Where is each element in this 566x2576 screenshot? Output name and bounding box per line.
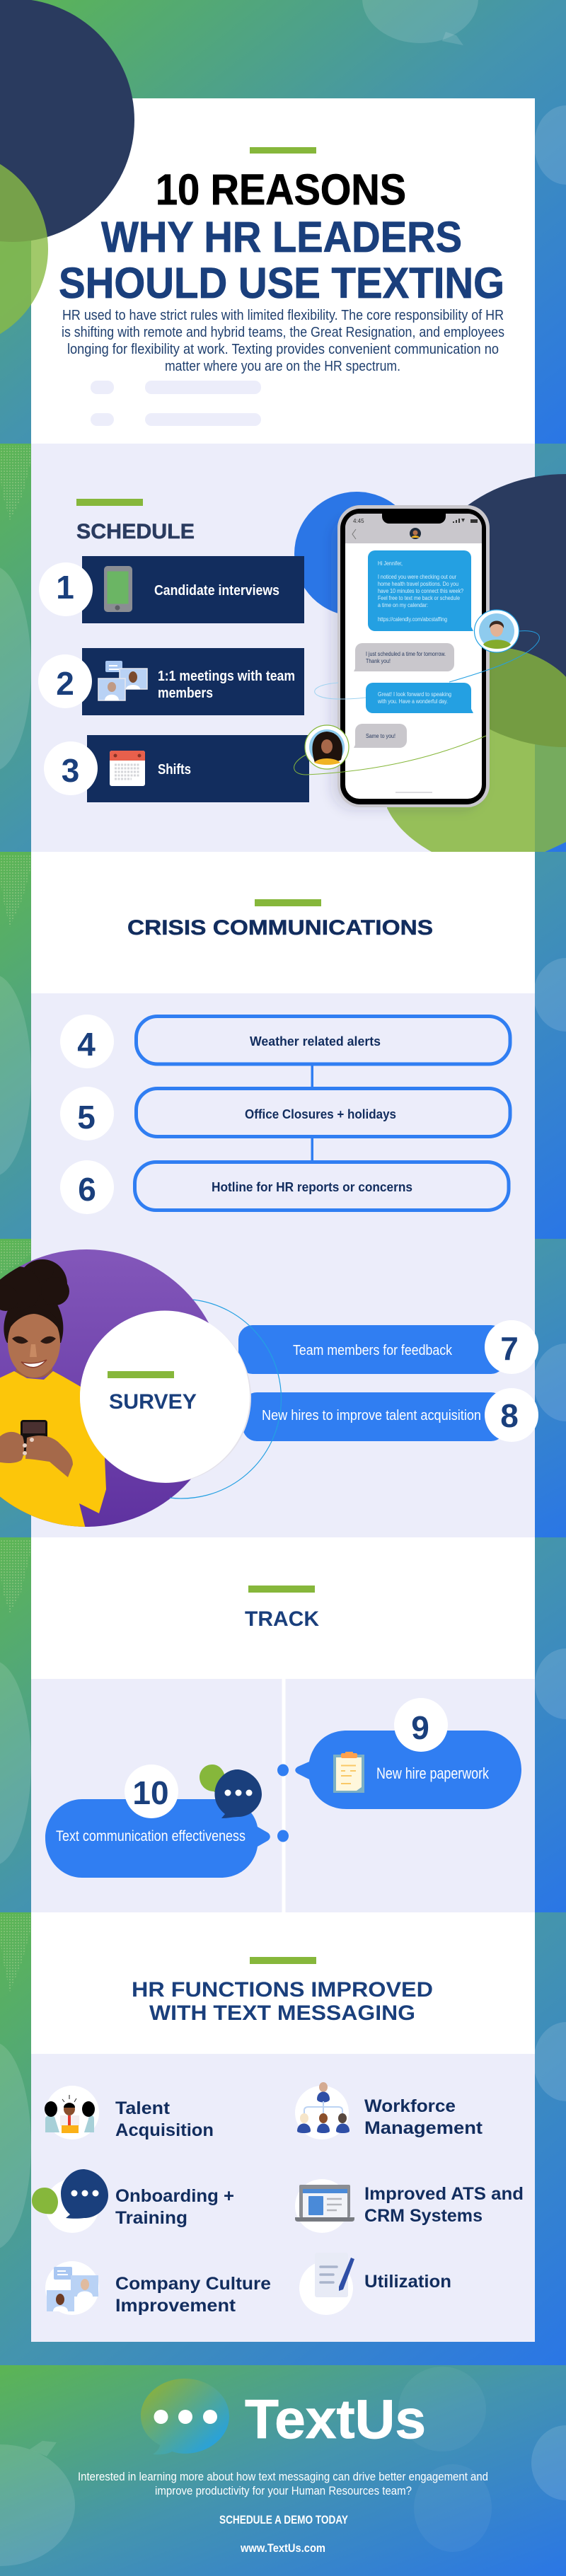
intro paragraph: longing for flexibility at work. Texting provides convenient communication no <box>67 342 499 357</box>
item 10: text communication effectiveness: Text communication effectiveness <box>56 1828 246 1844</box>
panel: track timeline <box>31 1679 535 1912</box>
placeholder pills <box>91 381 261 426</box>
title: SHOULD USE TEXTING <box>59 259 504 307</box>
item 3: shifts: 3 <box>62 752 79 789</box>
intro paragraph: matter where you are on the HR spectrum. <box>165 359 400 374</box>
chat bubble: outgoing 1: home health travel positions. Do you <box>378 581 458 587</box>
item 1: candidate interviews: 1 <box>56 569 74 606</box>
panel: intro white card <box>31 98 535 444</box>
panel: crisis communications heading <box>31 852 535 993</box>
avatar: woman <box>305 725 349 769</box>
panel: crisis communications heading: CRISIS COMMUNICATIONS <box>127 916 433 940</box>
item 3: shifts: Shifts <box>158 762 191 778</box>
chat bubble: outgoing 1: have 10 minutes to connect this week? <box>378 588 463 594</box>
item 4 <box>60 1015 510 1068</box>
logo <box>141 2379 426 2454</box>
item 2: one on one meetings: 2 <box>56 665 74 702</box>
panel: survey <box>0 1239 538 1537</box>
white circle with survey heading: SURVEY <box>109 1390 197 1414</box>
white circle with survey heading <box>80 1310 251 1483</box>
chat bubble: incoming 2 <box>354 724 407 748</box>
icon: phone <box>104 566 132 612</box>
function: company culture improvement: Improvement <box>115 2296 236 2316</box>
title: 10 REASONS <box>156 166 406 214</box>
panel: hr functions heading: HR FUNCTIONS IMPROVED <box>132 1978 433 2002</box>
chat bubble: outgoing 1: a time on my calendar: <box>378 602 428 608</box>
item 4: Weather related alerts <box>250 1034 381 1049</box>
title <box>59 147 504 307</box>
panel: hr functions heading: WITH TEXT MESSAGING <box>149 2002 415 2025</box>
function: utilization: Utilization <box>364 2272 451 2292</box>
item 5 <box>60 1087 510 1140</box>
hair bun <box>0 1259 69 1343</box>
footer <box>0 2367 566 2566</box>
item 4: 4 <box>77 1026 96 1063</box>
chat bubble: outgoing 1: https://calendly.com/abcstaffing <box>378 616 447 623</box>
panel: track heading: TRACK <box>245 1607 319 1631</box>
call to action text <box>78 2470 488 2555</box>
chat bubble: outgoing 1: Hi Jennifer, <box>378 560 403 567</box>
phone in hands <box>21 1420 47 1455</box>
item 6: 6 <box>78 1171 96 1208</box>
item 8: New hires to improve talent acquisition <box>262 1408 481 1423</box>
function: ats and crm: Improved ATS and <box>364 2184 524 2204</box>
chat bubble: incoming 1: I just scheduled a time for tomorrow. <box>366 651 446 657</box>
face <box>8 1308 60 1377</box>
avatar: man <box>474 610 519 652</box>
item 9: new hire paperwork: 9 <box>411 1709 429 1746</box>
function: talent acquisition: Acquisition <box>115 2120 214 2140</box>
item 9: new hire paperwork: New hire paperwork <box>376 1764 490 1782</box>
chat bubble: outgoing 2 <box>366 683 473 713</box>
schedule heading: SCHEDULE <box>76 520 195 543</box>
item 7: 7 <box>500 1330 519 1367</box>
blue bars <box>238 1325 505 1441</box>
item 5: Office Closures + holidays <box>245 1107 396 1121</box>
intro paragraph: is shifting with remote and hybrid teams, the Great Resignation, and employees <box>62 325 504 340</box>
item 6 <box>60 1160 509 1214</box>
schedule heading <box>76 499 195 543</box>
item 3: shifts <box>44 735 309 802</box>
function: company culture improvement: Company Culture <box>115 2274 271 2294</box>
call to action text: Interested in learning more about how text messaging can drive better engagement and <box>78 2470 488 2483</box>
intro paragraph: HR used to have strict rules with limited flexibility. The core responsibility of HR <box>62 308 504 323</box>
panel: schedule <box>31 444 566 852</box>
sweater <box>0 1371 106 1532</box>
chat bubble: incoming 1: Thank you! <box>366 658 391 664</box>
item 7 <box>293 1320 538 1374</box>
item 10: text communication effectiveness <box>45 1764 270 1878</box>
function: workforce management: Workforce <box>364 2096 456 2116</box>
phone mockup <box>331 505 490 810</box>
chat bubble: incoming 2: Same to you! <box>366 733 395 739</box>
phone mockup: 4:45 <box>353 518 364 524</box>
item 9: new hire paperwork <box>295 1698 521 1809</box>
chat bubble: incoming 1 <box>354 643 454 671</box>
function: onboarding and training <box>32 2169 234 2233</box>
call to action text: www.TextUs.com <box>240 2541 325 2555</box>
logo: TextUs <box>245 2388 426 2450</box>
call to action text: improve productivity for your Human Resources team? <box>155 2484 412 2497</box>
chat bubble: outgoing 1: I noticed you were checking out our <box>378 574 456 580</box>
item 6: Hotline for HR reports or concerns <box>212 1180 412 1194</box>
title: WHY HR LEADERS <box>101 213 462 261</box>
panel: hr functions heading <box>31 1912 535 2054</box>
icon: clipboard <box>333 1752 364 1793</box>
hands <box>0 1432 73 1477</box>
item 5: 5 <box>77 1099 96 1136</box>
function: onboarding and training: Training <box>115 2208 187 2228</box>
chat bubble: outgoing 2: Great! I look forward to speaking <box>378 691 451 698</box>
item 2: one on one meetings: members <box>158 686 213 701</box>
schedule background circles <box>294 474 566 852</box>
icon: video chat <box>98 661 147 700</box>
icon: calendar <box>110 751 145 786</box>
panel: hr functions grid <box>31 2054 535 2342</box>
item 1: candidate interviews <box>39 556 304 623</box>
chat bubble: outgoing 1 <box>368 550 473 631</box>
orbit lines <box>294 631 539 775</box>
panel: crisis list <box>31 993 535 1239</box>
function: company culture improvement <box>45 2261 271 2316</box>
item 2: one on one meetings: 1:1 meetings with team <box>158 669 295 684</box>
item 2: one on one meetings <box>38 648 304 715</box>
header decorative circles <box>0 0 134 348</box>
item 8: 8 <box>500 1397 519 1434</box>
function: onboarding and training: Onboarding + <box>115 2186 234 2206</box>
purple circle with woman <box>0 1249 225 1532</box>
icon: chat bubbles <box>200 1764 262 1818</box>
function: ats and crm: CRM Systems <box>364 2206 483 2226</box>
item 8 <box>262 1388 538 1442</box>
item 10: text communication effectiveness: 10 <box>132 1774 169 1811</box>
function: talent acquisition <box>45 2086 214 2140</box>
item 1: candidate interviews: Candidate interviews <box>154 583 279 599</box>
panel: track heading <box>31 1537 535 1679</box>
chat bubble: outgoing 2: with you. Have a wonderful day. <box>377 698 448 705</box>
item 7: Team members for feedback <box>293 1343 453 1358</box>
chat bubble: outgoing 1: Feel free to text me back or schedule <box>378 595 460 601</box>
function: utilization <box>299 2253 451 2315</box>
neck <box>16 1368 52 1378</box>
function: workforce management <box>295 2082 483 2139</box>
function: ats and crm <box>295 2179 524 2233</box>
call to action text: SCHEDULE A DEMO TODAY <box>219 2513 349 2526</box>
intro paragraph <box>62 308 504 374</box>
function: workforce management: Management <box>364 2118 483 2138</box>
function: talent acquisition: Talent <box>115 2098 171 2118</box>
